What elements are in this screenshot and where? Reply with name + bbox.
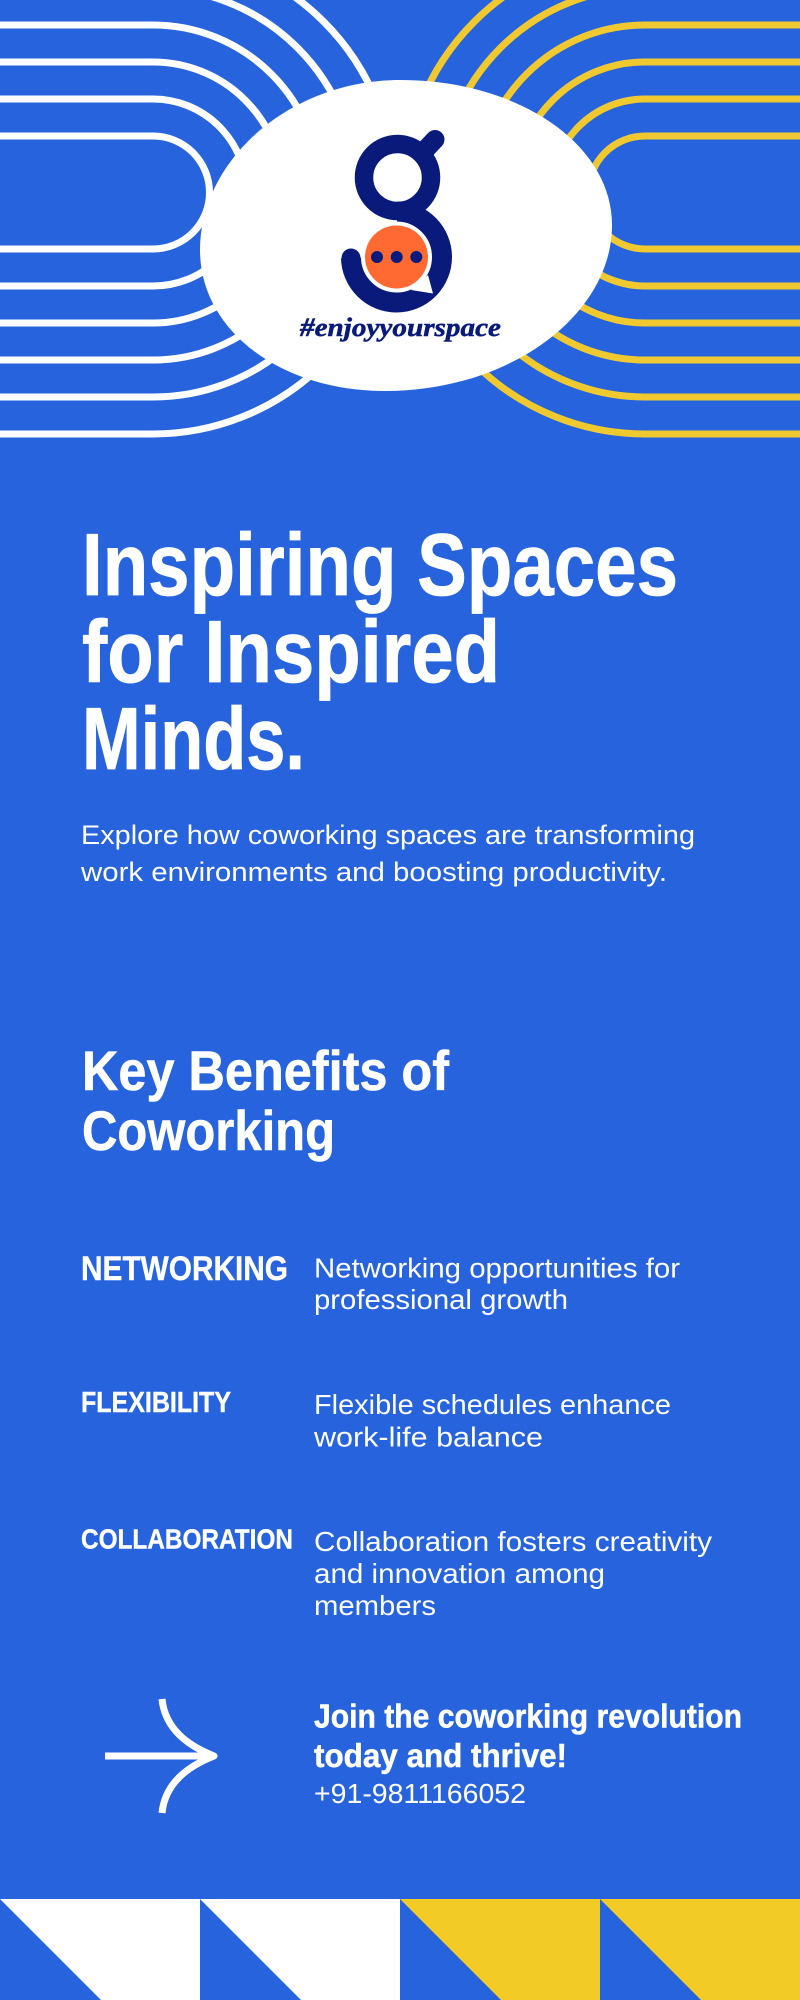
- description: Collaboration fosters creativity: [314, 1526, 712, 1557]
- hashtag: #enjoyyourspace: [299, 313, 501, 342]
- yellow concentric track lines: [404, 0, 800, 434]
- white concentric track lines: [0, 0, 394, 434]
- subtitle: work environments and boosting productivity.: [80, 857, 667, 887]
- section heading: [82, 1039, 449, 1162]
- white logo blob: [200, 80, 612, 391]
- subtitle: [80, 820, 695, 887]
- title: Minds.: [82, 689, 305, 788]
- benefit: networking: [81, 1250, 680, 1315]
- subtitle: Explore how coworking spaces are transforming: [81, 820, 695, 850]
- description: Flexible schedules enhance: [314, 1389, 671, 1420]
- label: NETWORKING: [81, 1250, 288, 1288]
- chat bubble: [362, 222, 433, 294]
- label: FLEXIBILITY: [81, 1387, 231, 1419]
- description: [313, 1389, 671, 1452]
- description: members: [314, 1590, 436, 1621]
- description: [314, 1526, 712, 1621]
- logo letter g: [342, 140, 442, 302]
- benefit: flexibility: [81, 1387, 671, 1452]
- logo: [299, 140, 501, 342]
- title: for Inspired: [82, 602, 500, 701]
- description: [314, 1252, 680, 1315]
- title: Inspiring Spaces: [82, 515, 678, 614]
- call to action: today and thrive!: [314, 1737, 567, 1774]
- description: work-life balance: [313, 1422, 543, 1452]
- section heading: Coworking: [82, 1099, 335, 1162]
- description: and innovation among: [314, 1558, 605, 1589]
- title: [82, 515, 678, 788]
- icon: arrow: [105, 1699, 214, 1813]
- footer triangles: [0, 1899, 800, 2000]
- call to action: Join the coworking revolution: [314, 1698, 742, 1734]
- description: Networking opportunities for: [314, 1252, 680, 1284]
- label: COLLABORATION: [81, 1524, 293, 1554]
- call to action: [314, 1698, 742, 1809]
- phone number: +91-9811166052: [314, 1778, 526, 1809]
- benefit: collaboration: [81, 1524, 712, 1621]
- description: professional growth: [314, 1284, 568, 1315]
- section heading: Key Benefits of: [82, 1039, 449, 1102]
